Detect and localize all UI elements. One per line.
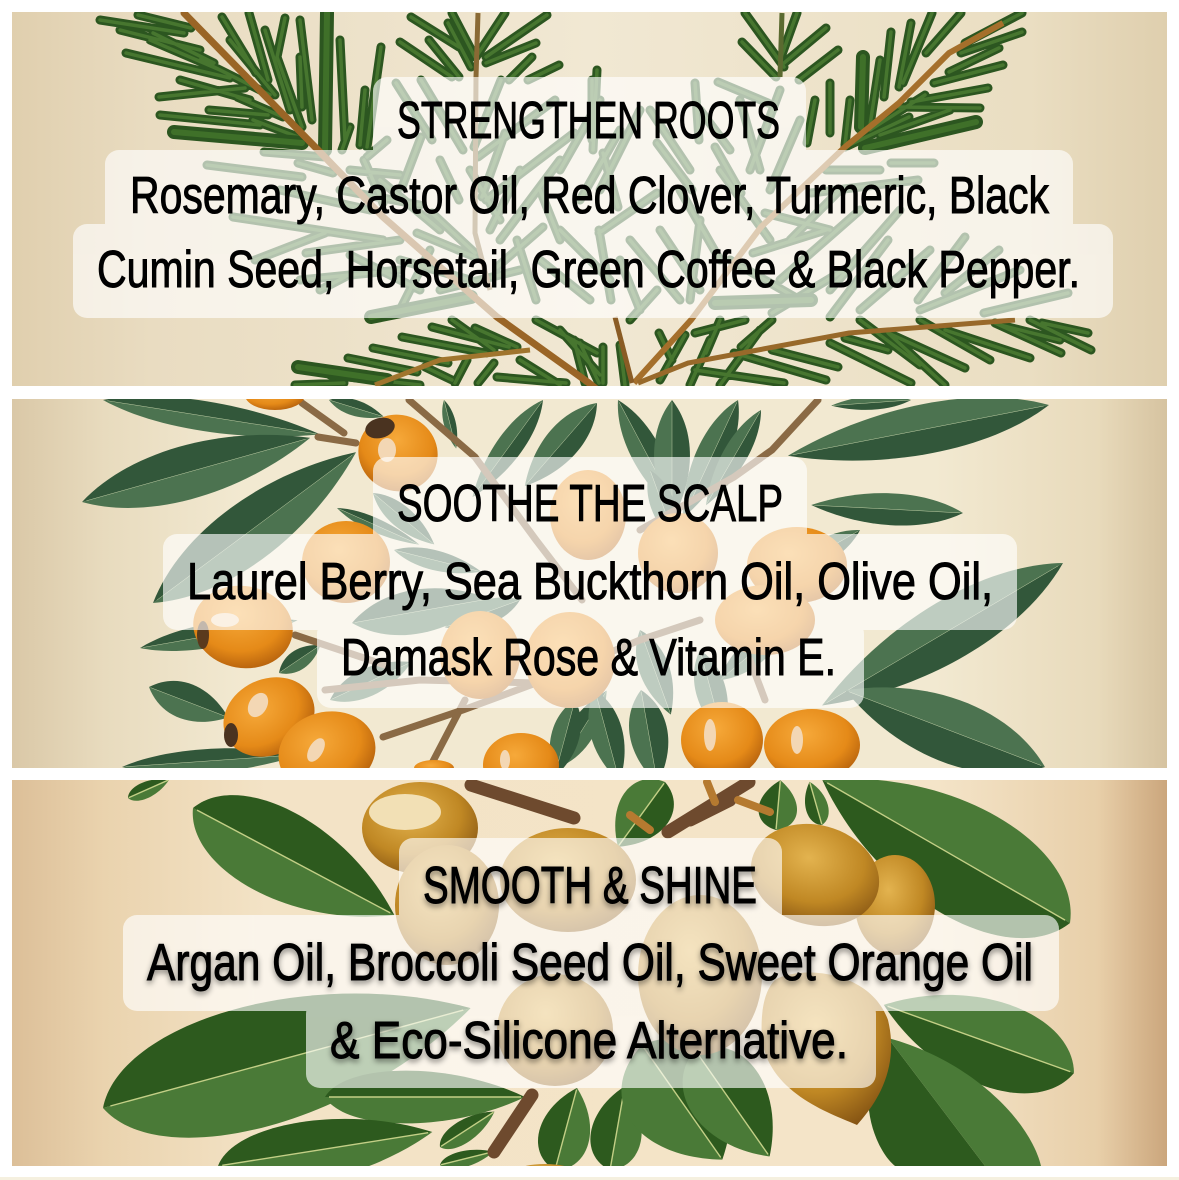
ingredients line 2: Damask Rose & Vitamin E. (341, 629, 836, 687)
heading: strengthen roots: STRENGTHEN ROOTS (397, 92, 780, 150)
ingredients line 1: Laurel Berry, Sea Buckthorn Oil, Olive Oil, (187, 553, 993, 611)
panel 3 paper background (12, 780, 1167, 1166)
ingredients line 2: & Eco-Silicone Alternative. (330, 1012, 848, 1070)
panel: strengthen roots (12, 12, 1167, 392)
heading: soothe the scalp: SOOTHE THE SCALP (397, 475, 783, 533)
panel: smooth and shine (12, 780, 1167, 1166)
translucent text backing 1 (73, 77, 1113, 318)
translucent text backing 3 (123, 838, 1059, 1088)
panel 2 paper background (12, 399, 1167, 768)
panel: soothe the scalp (12, 399, 1167, 768)
heading: smooth and shine: SMOOTH & SHINE (423, 857, 757, 915)
illustration: argan branch (103, 780, 1074, 1166)
translucent text backing 2 (163, 457, 1017, 708)
panel 1 paper background (12, 12, 1167, 386)
bottom cream strip (0, 1177, 1179, 1180)
illustration: rosemary branches (100, 13, 1091, 392)
illustration: sea buckthorn branch (75, 380, 1078, 803)
